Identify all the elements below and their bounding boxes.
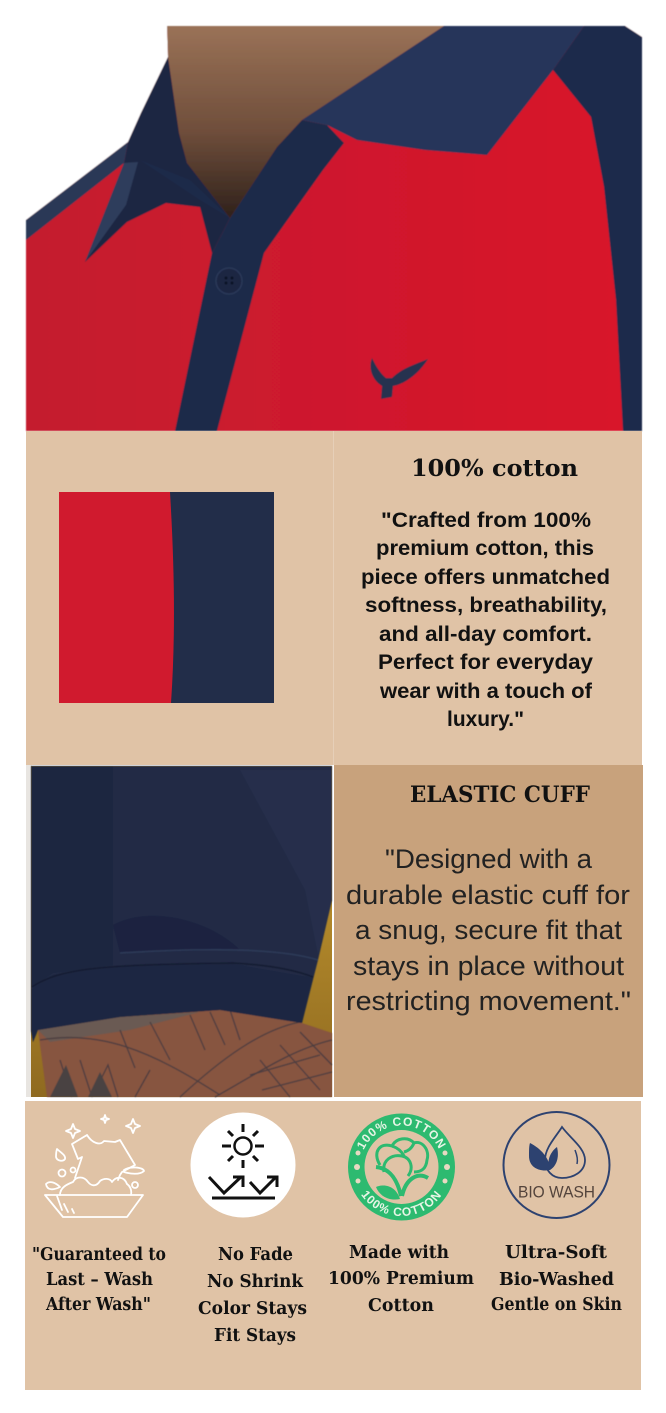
icon: bio wash badge: BIO WASH xyxy=(518,1182,595,1202)
icon: washing basin with shirt xyxy=(45,1115,144,1217)
cotton description text: "Crafted from 100% xyxy=(381,509,591,532)
elastic cuff description text xyxy=(346,844,631,1016)
elastic cuff description text: restricting movement." xyxy=(346,986,631,1016)
icon: 100% cotton badge: 100% COTTON xyxy=(358,1117,446,1150)
caption: premium cotton xyxy=(328,1243,474,1316)
panel: 100% cotton xyxy=(26,431,642,765)
icon: no fade no shrink sun badge xyxy=(190,1112,296,1218)
icon: 100% cotton badge: 100% COTTON xyxy=(361,1190,442,1216)
fabric swatch photo xyxy=(59,492,274,703)
cotton description text: Perfect for everyday xyxy=(378,651,593,674)
cotton description text: luxury." xyxy=(447,708,524,731)
panel: feature badges xyxy=(25,1101,641,1390)
caption: ultra-soft bio-washed: Ultra-Soft xyxy=(505,1243,607,1263)
caption: premium cotton: 100% Premium xyxy=(328,1269,474,1289)
caption: no fade no shrink: Color Stays xyxy=(198,1299,307,1319)
caption: ultra-soft bio-washed: Gentle on Skin xyxy=(491,1295,622,1315)
caption: wash durability: "Guaranteed to xyxy=(32,1245,166,1265)
heading: elastic cuff: ELASTIC CUFF xyxy=(410,782,590,808)
caption: ultra-soft bio-washed xyxy=(491,1243,622,1315)
panel: elastic cuff xyxy=(334,765,643,1097)
elastic cuff description text: "Designed with a xyxy=(385,844,593,874)
cotton description text xyxy=(361,509,610,731)
sleeve cuff photo xyxy=(26,765,332,1097)
caption: wash durability: Last – Wash xyxy=(46,1270,153,1290)
caption: wash durability xyxy=(32,1245,166,1315)
elastic cuff description text: stays in place without xyxy=(353,951,625,981)
elastic cuff description text: a snug, secure fit that xyxy=(355,915,623,945)
cotton description text: piece offers unmatched xyxy=(361,566,610,589)
caption: no fade no shrink: No Fade xyxy=(218,1245,293,1265)
caption: no fade no shrink: Fit Stays xyxy=(214,1326,296,1346)
cotton description text: premium cotton, this xyxy=(376,537,594,560)
heading: 100% cotton: 100% cotton xyxy=(411,454,578,482)
icon: 100% cotton badge xyxy=(348,1114,455,1220)
caption: premium cotton: Cotton xyxy=(368,1296,434,1316)
caption: premium cotton: Made with xyxy=(349,1243,449,1263)
caption: wash durability: After Wash" xyxy=(45,1295,151,1315)
cotton description text: softness, breathability, xyxy=(365,594,607,617)
cotton description text: wear with a touch of xyxy=(379,680,593,703)
caption: ultra-soft bio-washed: Bio-Washed xyxy=(499,1270,614,1290)
cotton description text: and all-day comfort. xyxy=(379,623,592,646)
caption: no fade no shrink: No Shrink xyxy=(207,1272,304,1292)
icon: bio wash badge xyxy=(504,1112,610,1218)
elastic cuff description text: durable elastic cuff for xyxy=(346,880,630,910)
hero photo: polo collar and chest xyxy=(26,26,642,431)
caption: no fade no shrink xyxy=(198,1245,307,1346)
